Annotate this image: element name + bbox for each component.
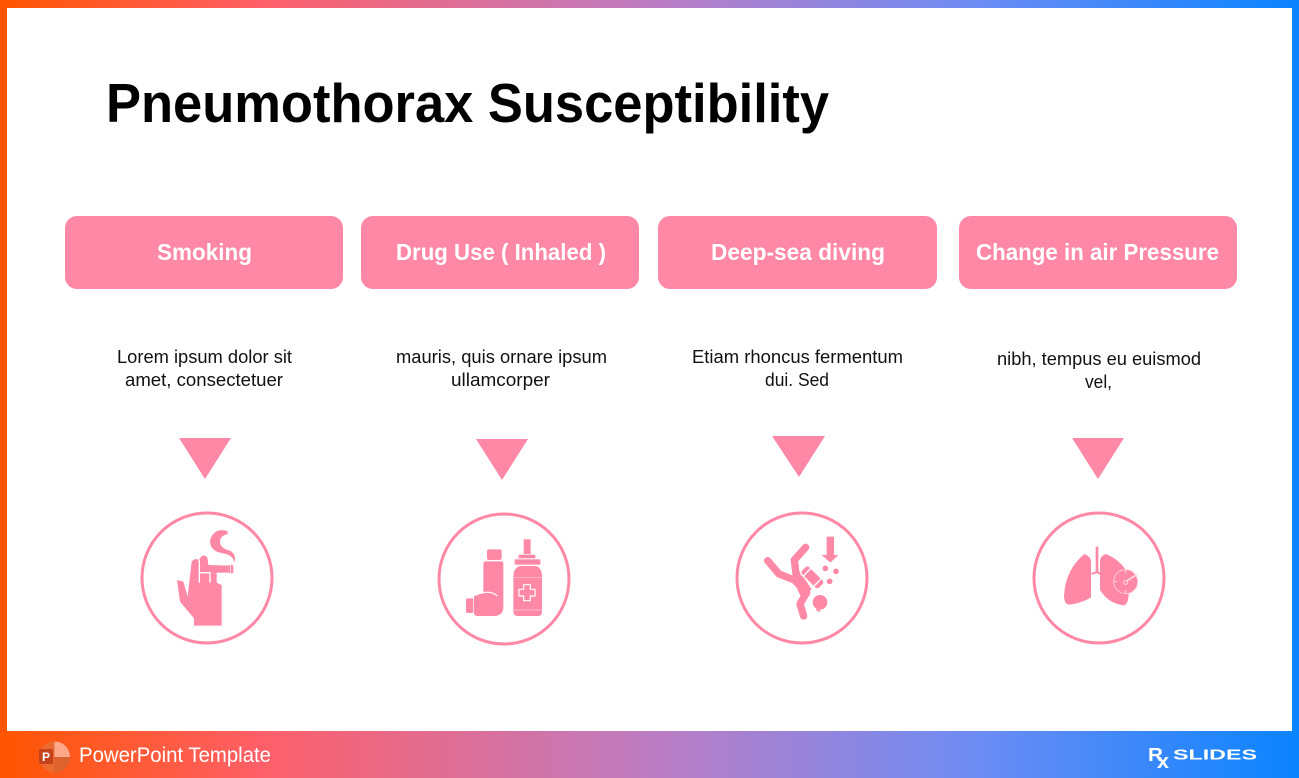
arrow: smoking [179,438,231,479]
footer label: PowerPoint Template [79,744,271,767]
text block: smoking [117,347,292,390]
logo: RX Slides: SLIDES [1173,746,1257,764]
arrow: drug use [476,439,528,480]
text block: drug use: mauris, quis ornare ipsum [396,347,607,367]
header: Drug Use [361,216,639,289]
icon ring: air pressure [1034,513,1164,643]
arrow: diving [772,436,825,477]
icon ring: diving [737,513,867,643]
header: Change in air Pressure: Change in air Pressure [976,239,1219,265]
logo: RX Slides: x [1157,751,1169,773]
header: Deep-sea diving [658,216,937,289]
text block: drug use [396,347,607,390]
header: Change in air Pressure [959,216,1237,289]
text block: drug use: ullamcorper [451,370,550,390]
text block: diving: dui. Sed [765,370,829,390]
text block: smoking: Lorem ipsum dolor sit [117,347,292,367]
icon: PowerPoint logo [39,742,70,772]
text block: air pressure [997,349,1201,392]
title: Pneumothorax Susceptibility [106,72,829,134]
icon ring: drug use [439,514,569,644]
header: Deep-sea diving: Deep-sea diving [711,239,885,265]
header: Smoking [65,216,343,289]
icon: PowerPoint logo: P [42,750,50,764]
logo: RX Slides: R [1148,745,1163,765]
icon: inhaler and nasal spray [466,539,542,616]
header: Smoking: Smoking [157,239,252,265]
text block: air pressure: vel, [1085,372,1112,392]
icon: hand with cigarette [177,530,235,626]
header: Drug Use: Drug Use ( Inhaled ) [396,239,606,265]
text block: air pressure: nibh, tempus eu euismod [997,349,1201,369]
text block: diving: Etiam rhoncus fermentum [692,347,903,367]
logo: RX Slides [1148,745,1257,773]
icon ring: smoking [142,513,272,643]
icon: lungs with pressure gauge [1064,547,1138,605]
arrow: air pressure [1072,438,1124,479]
text block: diving [692,347,903,390]
text block: smoking: amet, consectetuer [125,370,283,390]
icon: diver descending [768,537,839,616]
